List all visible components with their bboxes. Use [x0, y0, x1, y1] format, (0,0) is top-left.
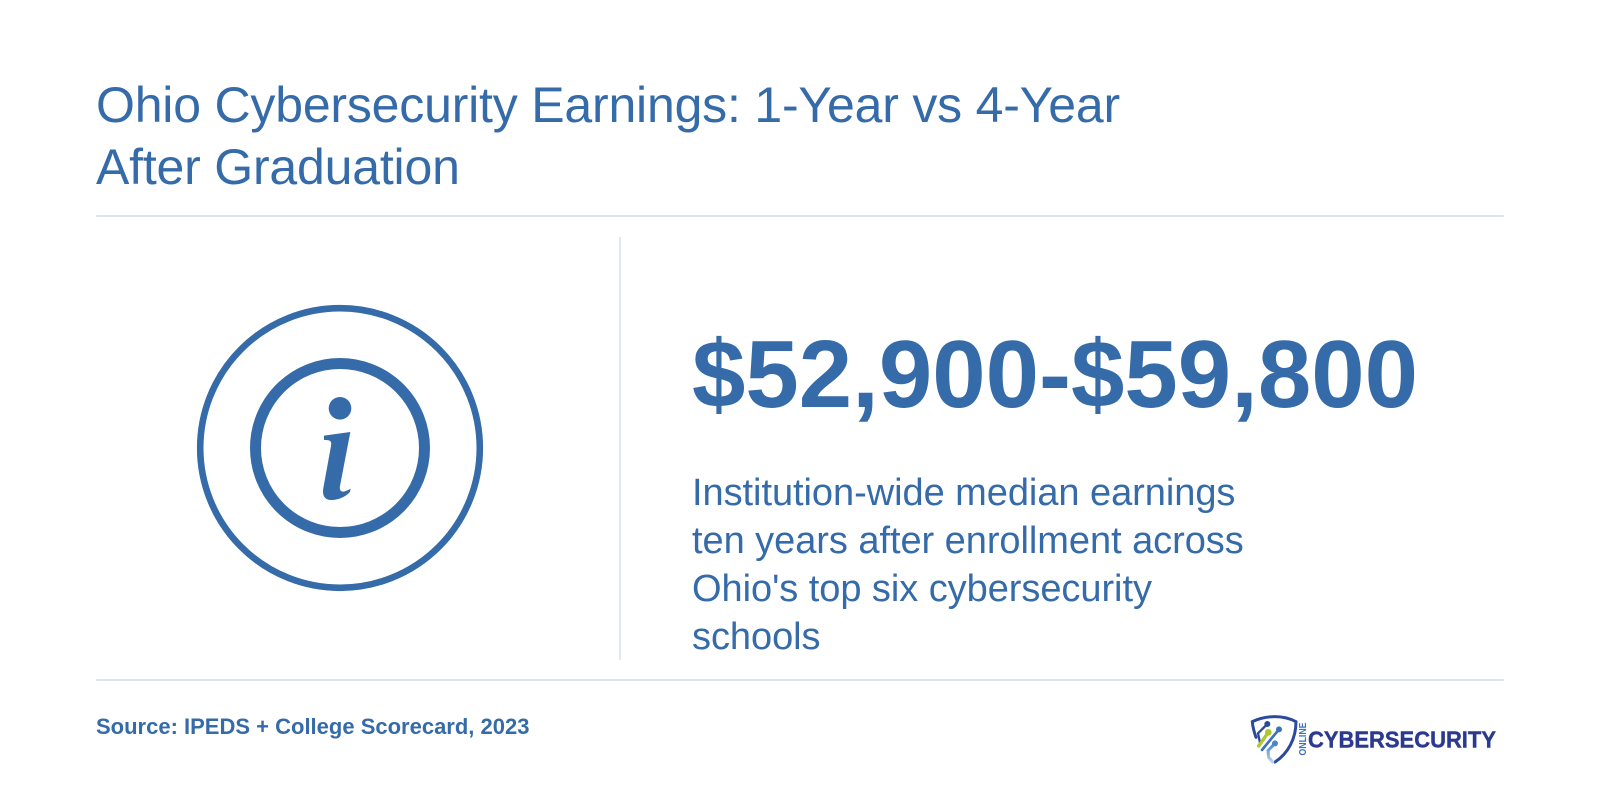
icon: logo shield: [1252, 717, 1296, 762]
title: [96, 77, 1120, 195]
icon: information circle: [196, 304, 484, 592]
headline figure: $52,900-$59,800: [692, 321, 1418, 428]
logo small text: ONLINE: [1297, 722, 1309, 756]
description text: Institution-wide median earnings: [692, 472, 1235, 514]
title: Ohio Cybersecurity Earnings: 1-Year vs 4-Year: [96, 77, 1120, 133]
source note: Source: IPEDS + College Scorecard, 2023: [96, 714, 529, 739]
logo: [1250, 715, 1496, 764]
description text: Ohio's top six cybersecurity: [692, 568, 1152, 610]
title: After Graduation: [96, 139, 460, 195]
description text: [692, 472, 1244, 658]
description text: schools: [692, 616, 820, 658]
logo wordmark: CYBERSECURITY: [1308, 726, 1496, 752]
description text: ten years after enrollment across: [692, 520, 1244, 562]
